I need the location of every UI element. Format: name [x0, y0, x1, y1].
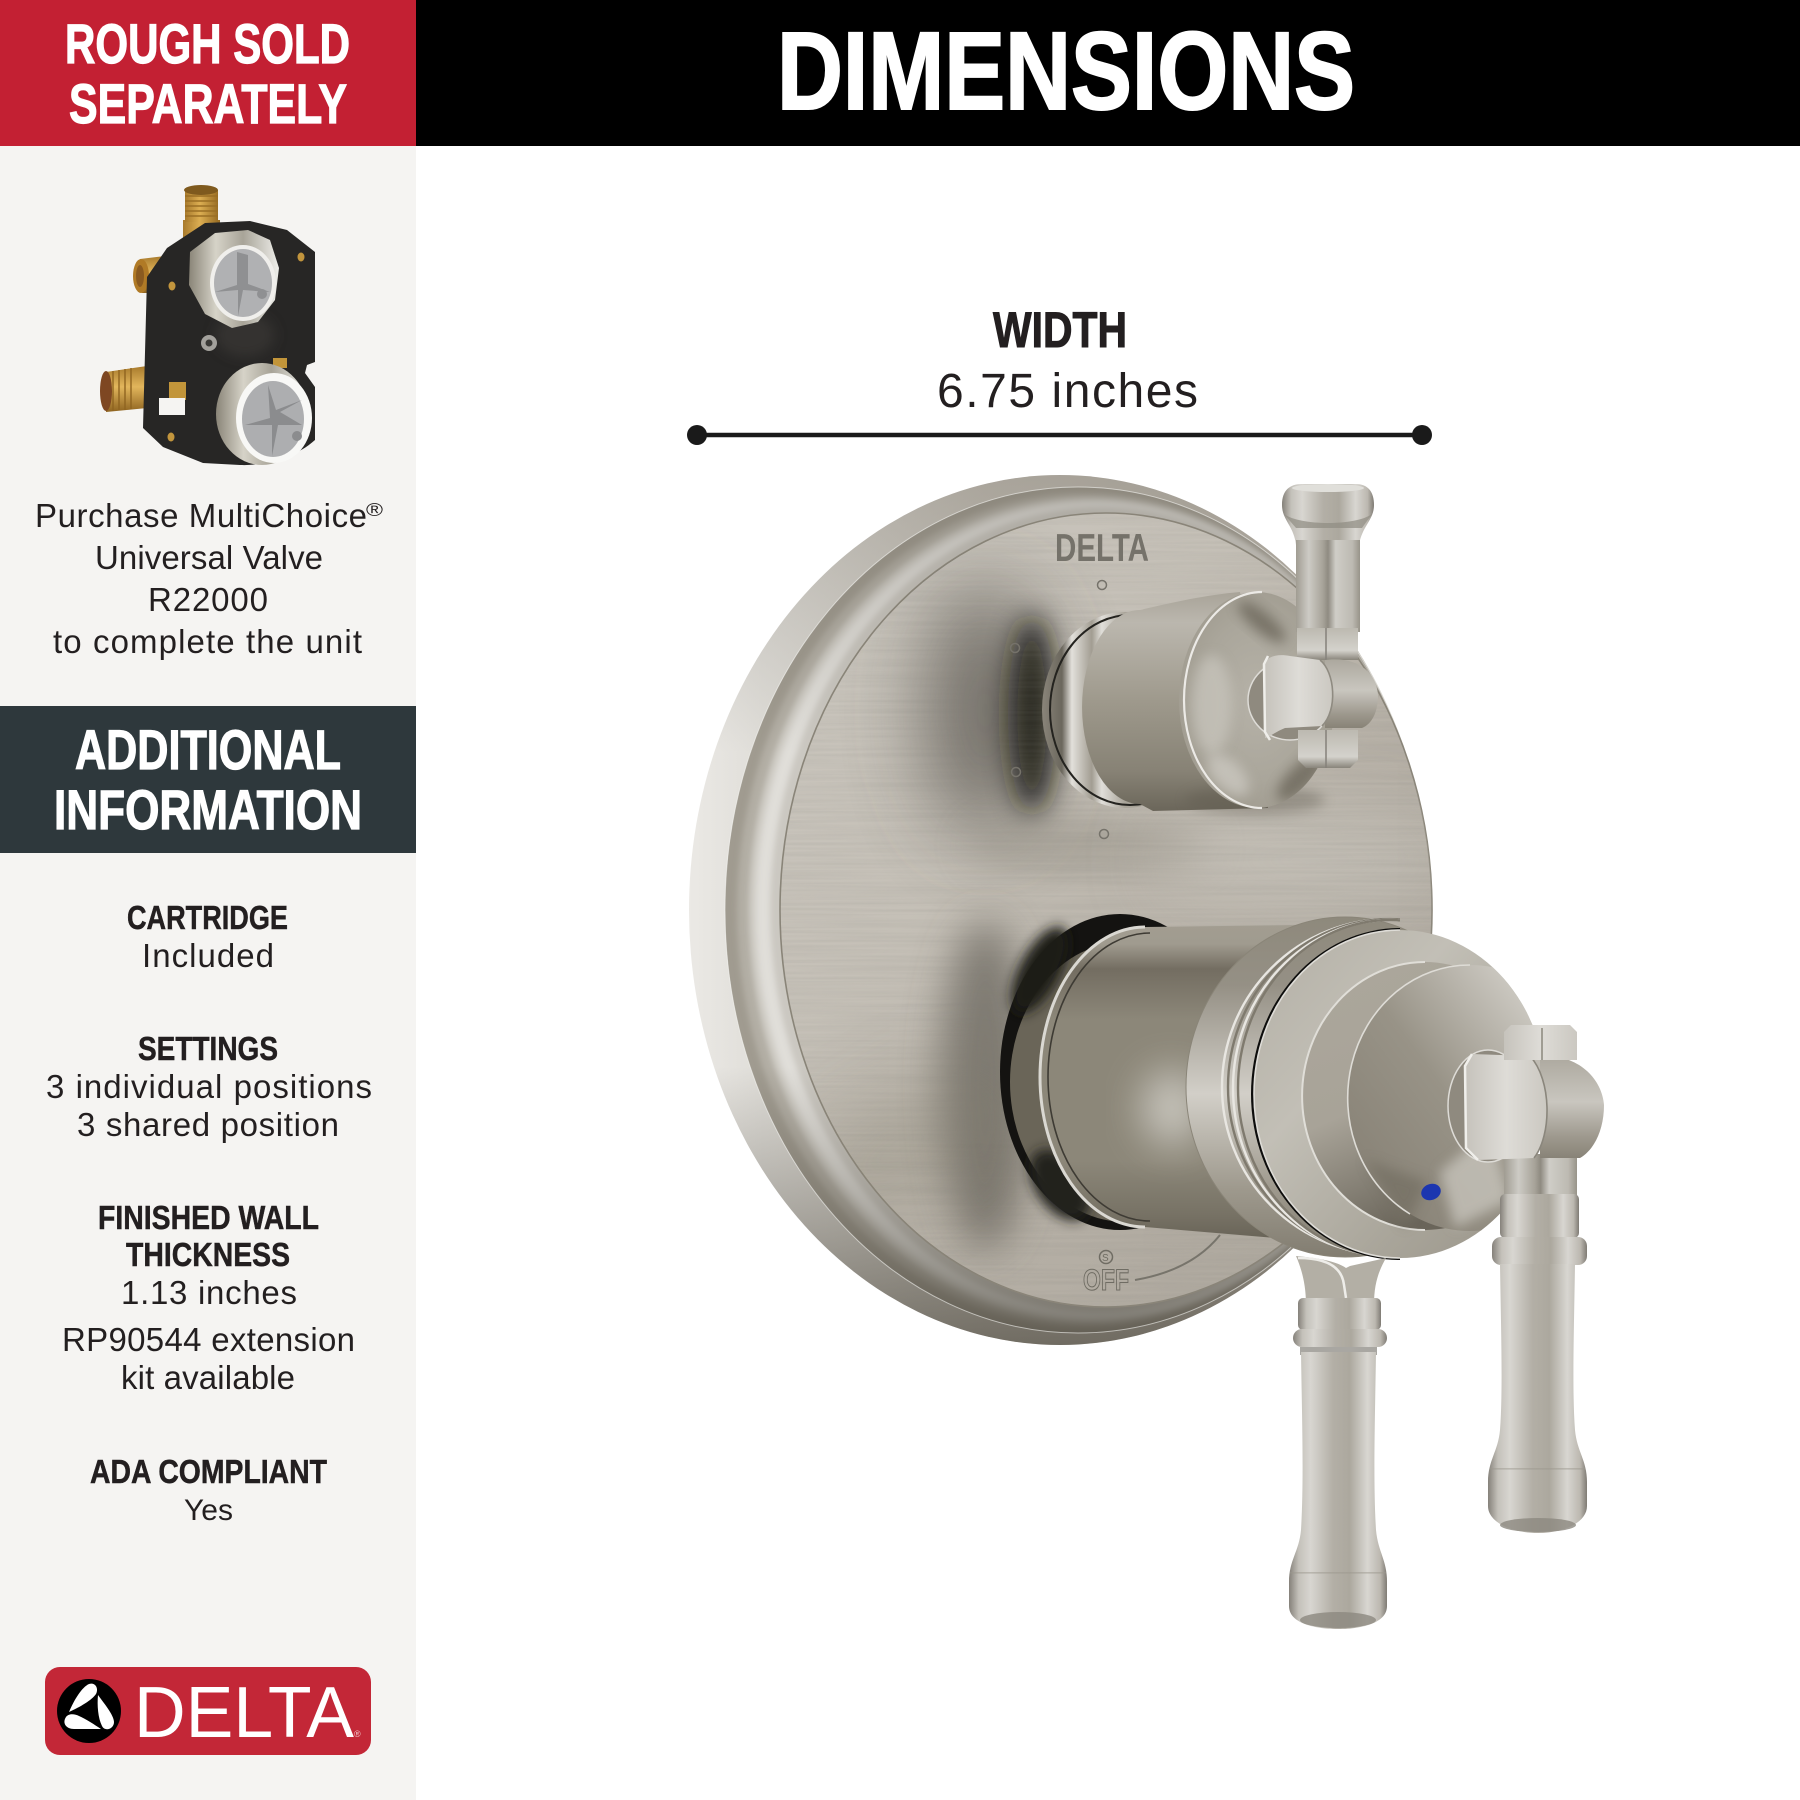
header: rough sold separately: [0, 0, 416, 146]
additional information heading: [0, 706, 416, 853]
off marking: S: [1102, 1253, 1109, 1264]
header: rough sold separately: ROUGH SOLD: [65, 13, 350, 75]
valve purchase text: R22000: [148, 581, 268, 618]
spec: finished wall thickness: 1.13 inches: [121, 1274, 297, 1311]
plate engraving: DELTA: [1055, 527, 1149, 570]
wall plate: [689, 475, 1460, 1345]
upper diverter knob: [1042, 592, 1335, 814]
spec: finished wall thickness: RP90544 extension: [62, 1321, 355, 1358]
valve purchase text: ®: [366, 500, 383, 520]
spec: settings: [46, 1030, 372, 1143]
spec: finished wall thickness: kit available: [121, 1359, 295, 1396]
header: rough sold separately: SEPARATELY: [69, 73, 347, 135]
spec: cartridge: [127, 899, 288, 974]
lower handle recess: [1000, 914, 1240, 1232]
lower side lever: [1448, 1025, 1604, 1533]
Delta logo: DELTA: [134, 1673, 354, 1753]
spec: finished wall thickness: [62, 1199, 355, 1396]
valve purchase text: Universal Valve: [95, 539, 323, 576]
lower handle cylinder: [1040, 925, 1300, 1240]
width dimension line: [687, 425, 1432, 445]
header: dimensions title: [416, 0, 1800, 146]
header: dimensions title: DIMENSIONS: [777, 10, 1355, 133]
spec: ADA compliant: ADA COMPLIANT: [90, 1453, 327, 1490]
off marking: OFF: [1083, 1264, 1129, 1297]
width label: [937, 302, 1198, 418]
spec: settings: 3 individual positions: [46, 1068, 372, 1105]
lower front lever: [1289, 1256, 1387, 1629]
sidebar panel: [0, 0, 416, 1800]
additional information heading: INFORMATION: [54, 778, 362, 841]
plate engraving: [1010, 527, 1149, 838]
spec: settings: 3 shared position: [77, 1106, 339, 1143]
valve purchase text: [35, 497, 383, 660]
spec: settings: SETTINGS: [138, 1030, 278, 1067]
Delta logo: [45, 1667, 371, 1755]
product: valve trim: [689, 475, 1604, 1629]
width label: WIDTH: [993, 302, 1127, 358]
rough valve image: [100, 185, 315, 465]
off marking: [1083, 1235, 1220, 1297]
valve purchase text: to complete the unit: [53, 623, 362, 660]
width label: 6.75 inches: [937, 365, 1198, 418]
spec: ADA compliant: Yes: [184, 1494, 233, 1527]
spec: finished wall thickness: FINISHED WALL: [98, 1199, 319, 1236]
spec: cartridge: Included: [142, 937, 274, 974]
spec: cartridge: CARTRIDGE: [127, 899, 288, 936]
upper lever handle: [1248, 484, 1378, 768]
Delta logo: ®: [354, 1729, 361, 1739]
valve purchase text: Purchase MultiChoice: [35, 497, 367, 534]
additional information heading: ADDITIONAL: [75, 718, 341, 781]
blue temperature dot: [1419, 1181, 1443, 1203]
spec: finished wall thickness: THICKNESS: [126, 1236, 290, 1273]
spec: ADA compliant: [90, 1453, 327, 1527]
lower handle collar: [1186, 916, 1540, 1260]
